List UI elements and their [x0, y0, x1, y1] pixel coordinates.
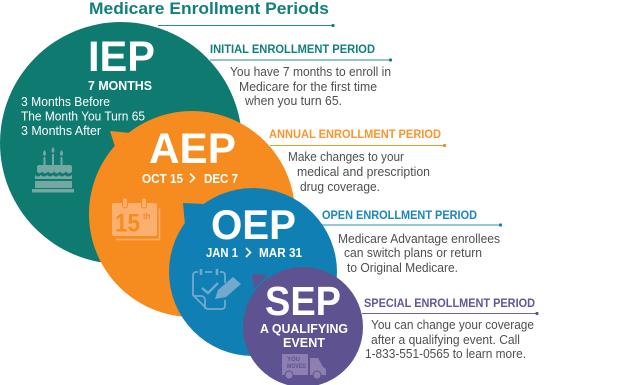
- icon: calendar: [112, 198, 160, 240]
- panel: AEP circle: DEC 7: [204, 171, 238, 186]
- panel: OEP circle: MAR 31: [259, 245, 302, 260]
- panel: AEP circle: [89, 111, 295, 317]
- text block: open enrollment period: Medicare Advantage enrollees: [338, 232, 500, 246]
- panel: IEP circle: [0, 22, 242, 264]
- panel: IEP circle: IEP: [88, 33, 155, 81]
- panel: IEP circle: The Month You Turn 65: [21, 110, 145, 124]
- text block: open enrollment period: can switch plans or return: [344, 246, 482, 260]
- panel: SEP circle: A QUALIFYING: [260, 321, 348, 336]
- icon: calendar: 15: [115, 210, 140, 238]
- panel: OEP circle: OEP: [211, 201, 296, 248]
- text block: initial enrollment period: when you turn 65.: [244, 94, 342, 108]
- text block: annual enrollment period: drug coverage.: [300, 180, 380, 194]
- text block: open enrollment period: OPEN ENROLLMENT PERIOD: [322, 210, 477, 222]
- panel: SEP circle: [243, 267, 363, 385]
- text block: special enrollment period: [362, 298, 539, 361]
- text block: initial enrollment period: You have 7 months to enroll in: [230, 65, 391, 79]
- panel: AEP circle: OCT 15: [142, 171, 183, 186]
- icon: calendar: th: [143, 212, 151, 221]
- text block: annual enrollment period: Make changes to your: [288, 150, 404, 164]
- panel: IEP circle: 3 Months After: [21, 124, 101, 138]
- text block: annual enrollment period: [269, 129, 446, 194]
- icon: birthday cake: [32, 147, 74, 192]
- panel: OEP circle: JAN 1: [206, 245, 238, 260]
- icon: clipboard and pencil: [193, 269, 241, 309]
- text block: annual enrollment period: ANNUAL ENROLLMENT PERIOD: [269, 129, 441, 141]
- panel: OEP circle: [169, 188, 337, 356]
- text block: annual enrollment period: medical and prescription: [297, 165, 430, 179]
- panel: IEP circle: 3 Months Before: [21, 95, 110, 109]
- icon: moving truck: YOU: [287, 357, 300, 363]
- text block: special enrollment period: 1-833-551-0565 to learn more.: [365, 347, 526, 361]
- panel: SEP circle: EVENT: [283, 335, 325, 350]
- icon: moving truck: [282, 354, 326, 379]
- title: [89, 0, 335, 27]
- text block: initial enrollment period: INITIAL ENROLLMENT PERIOD: [210, 44, 375, 56]
- text block: special enrollment period: You can change your coverage: [371, 318, 534, 332]
- panel: SEP circle: SEP: [265, 278, 341, 324]
- text block: special enrollment period: after a qualifying event. Call: [371, 333, 520, 347]
- panel: AEP circle: AEP: [149, 125, 236, 173]
- panel: IEP circle: 7 MONTHS: [88, 78, 152, 93]
- text block: initial enrollment period: Medicare for the first time: [239, 80, 377, 94]
- icon: moving truck: MOVED: [287, 364, 307, 370]
- text block: open enrollment period: [322, 210, 502, 275]
- text block: special enrollment period: SPECIAL ENROLLMENT PERIOD: [364, 298, 535, 310]
- text block: initial enrollment period: [210, 44, 392, 108]
- text block: open enrollment period: to Original Medicare.: [347, 261, 458, 275]
